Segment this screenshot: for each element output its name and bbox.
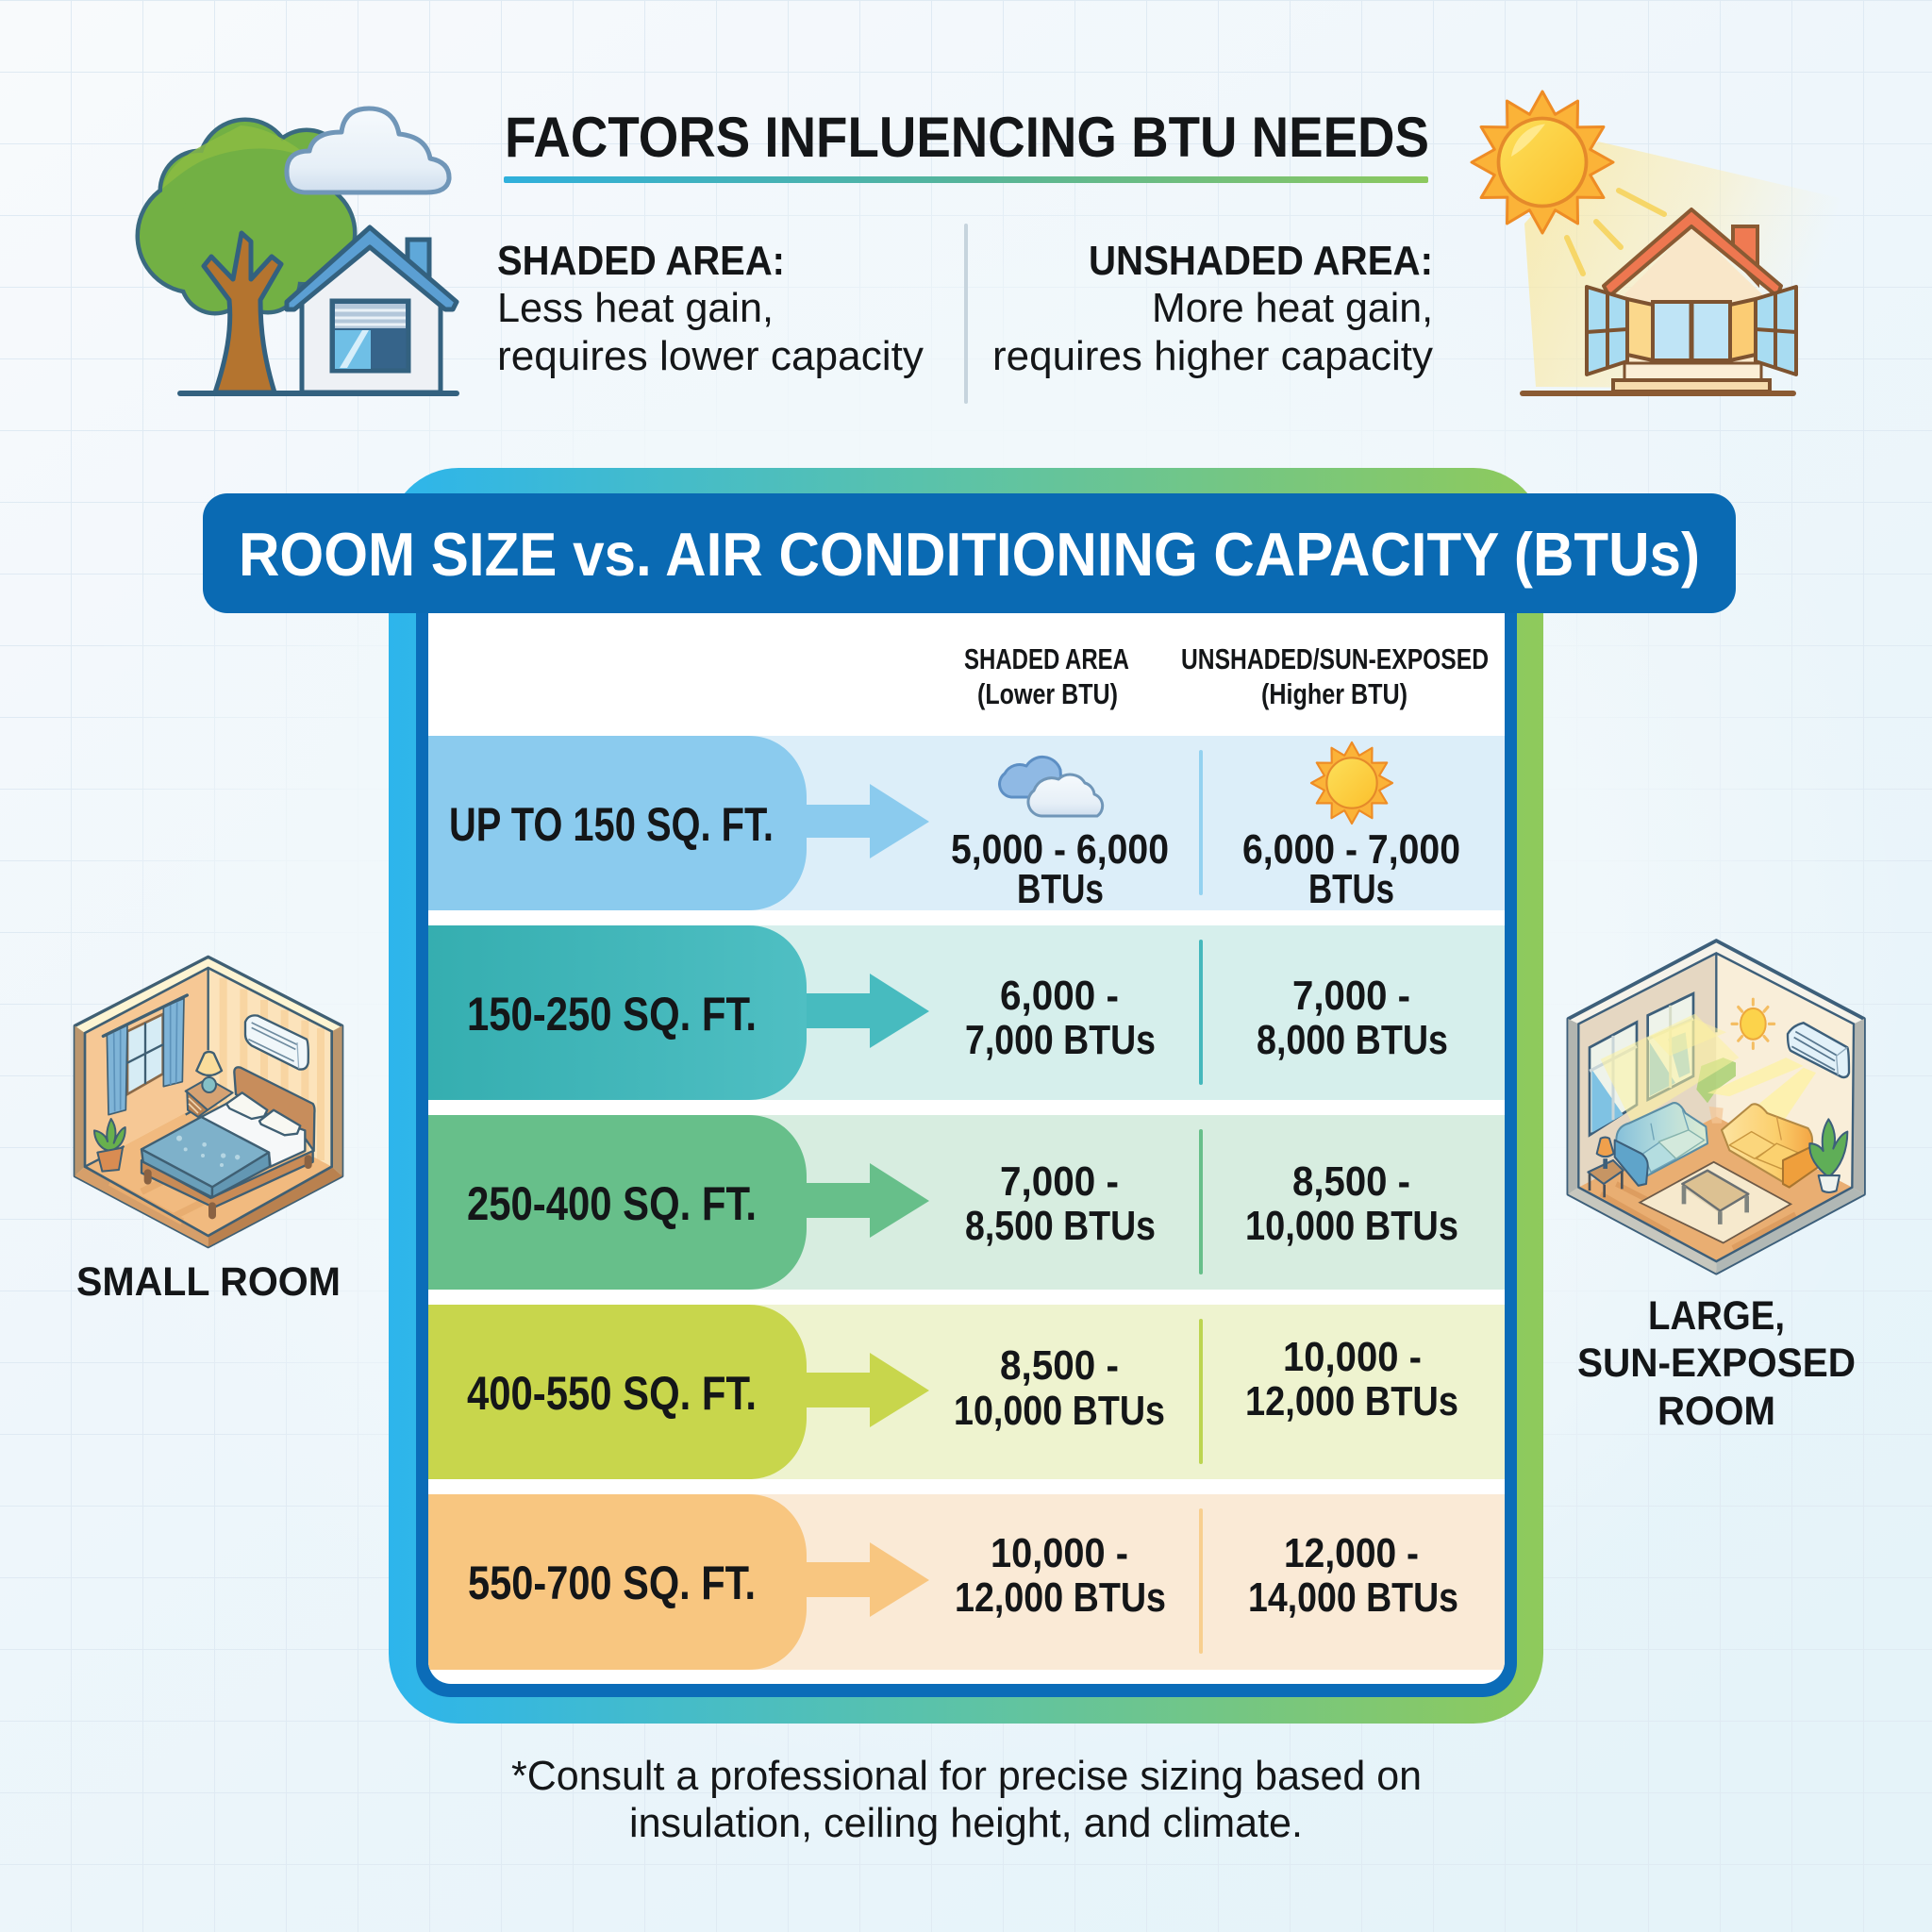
ground line [1520, 391, 1796, 396]
sun [1472, 92, 1613, 233]
plant [1809, 1119, 1847, 1192]
ghost plant through glare [1696, 1058, 1736, 1103]
row: up to 150 sq ft: BTUs [1017, 866, 1104, 912]
walls [1624, 226, 1762, 366]
row: 150-250 sq ft: 8,000 BTUs [1257, 1017, 1448, 1063]
row: 550-700 sq ft: 14,000 BTUs [1248, 1574, 1458, 1621]
header: factors influencing BTU needs [497, 106, 1433, 404]
row: 550-700 sq ft [428, 1494, 1505, 1670]
row: 400-550 sq ft: 400-550 SQ. FT. [467, 1367, 757, 1420]
footnote [511, 1753, 1422, 1846]
panel: room size vs capacity table [203, 468, 1736, 1724]
title banner: ROOM SIZE vs. AIR CONDITIONING CAPACITY (BTUs) [239, 520, 1700, 589]
row: up to 150 sq ft: BTUs [1308, 866, 1394, 912]
row: 550-700 sq ft: 12,000 - [1284, 1530, 1419, 1576]
row: up to 150 sq ft: 6,000 - 7,000 [1242, 826, 1460, 873]
row: 250-400 sq ft [428, 1115, 1505, 1290]
row: 150-250 sq ft: 7,000 - [1292, 973, 1410, 1019]
title underline [504, 176, 1428, 183]
yellow sofa [1722, 1104, 1818, 1188]
rug and coffee table [1640, 1162, 1790, 1242]
footnote: *Consult a professional for precise sizing based on [511, 1753, 1422, 1799]
cloud [287, 108, 449, 192]
text block: shaded area: requires lower capacity [497, 333, 924, 379]
text block: shaded area: SHADED AREA: [497, 238, 785, 284]
air conditioner [245, 1015, 308, 1070]
title banner [203, 493, 1736, 613]
icon: large sun-exposed room isometric [1568, 941, 1864, 1274]
white table background [428, 575, 1505, 1684]
icon: small room isometric [75, 957, 342, 1247]
icon: shaded house with tree and cloud [140, 108, 459, 396]
text block: shaded area: Less heat gain, [497, 285, 774, 331]
row: 250-400 sq ft: 250-400 SQ. FT. [467, 1177, 757, 1230]
row: 400-550 sq ft [428, 1305, 1505, 1479]
column headers [964, 642, 1489, 710]
row: 150-250 sq ft: 150-250 SQ. FT. [467, 988, 757, 1041]
row: 150-250 sq ft: 6,000 - [1000, 973, 1119, 1019]
row: 550-700 sq ft: 550-700 SQ. FT. [468, 1557, 756, 1609]
row: up to 150 sq ft [428, 736, 1505, 912]
icon: small sun [1311, 742, 1392, 824]
row: up to 150 sq ft: 5,000 - 6,000 [951, 826, 1169, 873]
row: 400-550 sq ft: 10,000 BTUs [954, 1388, 1165, 1434]
title: FACTORS INFLUENCING BTU NEEDS [505, 106, 1429, 169]
text block: unshaded area: requires higher capacity [992, 333, 1433, 379]
gradient frame [389, 468, 1543, 1724]
icon: sun-exposed house [1472, 92, 1840, 396]
label: small room: SMALL ROOM [76, 1259, 341, 1305]
text block: unshaded area: More heat gain, [1152, 285, 1433, 331]
column headers: UNSHADED/SUN-EXPOSED [1181, 642, 1489, 675]
row: 250-400 sq ft: 7,000 - [1000, 1158, 1119, 1205]
blue inner border [416, 528, 1517, 1697]
column headers: (Lower BTU) [977, 677, 1118, 710]
row: 550-700 sq ft: 12,000 BTUs [955, 1574, 1166, 1621]
text block: unshaded area [992, 238, 1433, 379]
row: 550-700 sq ft: 10,000 - [991, 1530, 1128, 1576]
side table and lamp [1588, 1138, 1624, 1197]
row: 150-250 sq ft [428, 925, 1505, 1100]
window and curtains [103, 995, 187, 1115]
label: large sun-exposed room: ROOM [1657, 1389, 1775, 1434]
row: up to 150 sq ft: UP TO 150 SQ. FT. [449, 798, 774, 851]
center divider [964, 224, 968, 404]
footnote: insulation, ceiling height, and climate. [629, 1800, 1303, 1846]
row: 250-400 sq ft: 8,500 - [1292, 1158, 1410, 1205]
ground line [177, 391, 459, 396]
windows [1590, 993, 1693, 1135]
plant [94, 1119, 125, 1172]
label: large sun-exposed room: LARGE, [1648, 1293, 1785, 1339]
blue sofa [1615, 1103, 1707, 1186]
column headers: SHADED AREA [964, 642, 1129, 675]
air conditioner [1788, 1023, 1849, 1077]
row: 400-550 sq ft: 10,000 - [1283, 1334, 1422, 1380]
column headers: (Higher BTU) [1261, 677, 1407, 710]
row: 400-550 sq ft: 12,000 BTUs [1245, 1378, 1458, 1424]
row: 400-550 sq ft: 8,500 - [1000, 1342, 1119, 1389]
row: 250-400 sq ft: 8,500 BTUs [965, 1203, 1156, 1249]
text block: shaded area [497, 238, 924, 379]
lamp and nightstand [186, 1052, 233, 1117]
sun beams [1601, 1014, 1816, 1126]
icon: small clouds [1000, 757, 1103, 816]
sun on wall [1732, 999, 1774, 1048]
sun rays [1567, 191, 1664, 274]
row: 250-400 sq ft: 10,000 BTUs [1245, 1203, 1458, 1249]
label: large sun-exposed room: SUN-EXPOSED [1577, 1341, 1856, 1386]
bed [142, 1067, 314, 1215]
text block: unshaded area: UNSHADED AREA: [1089, 238, 1433, 284]
label: large sun-exposed room [1577, 1293, 1856, 1434]
row: 150-250 sq ft: 7,000 BTUs [965, 1017, 1156, 1063]
